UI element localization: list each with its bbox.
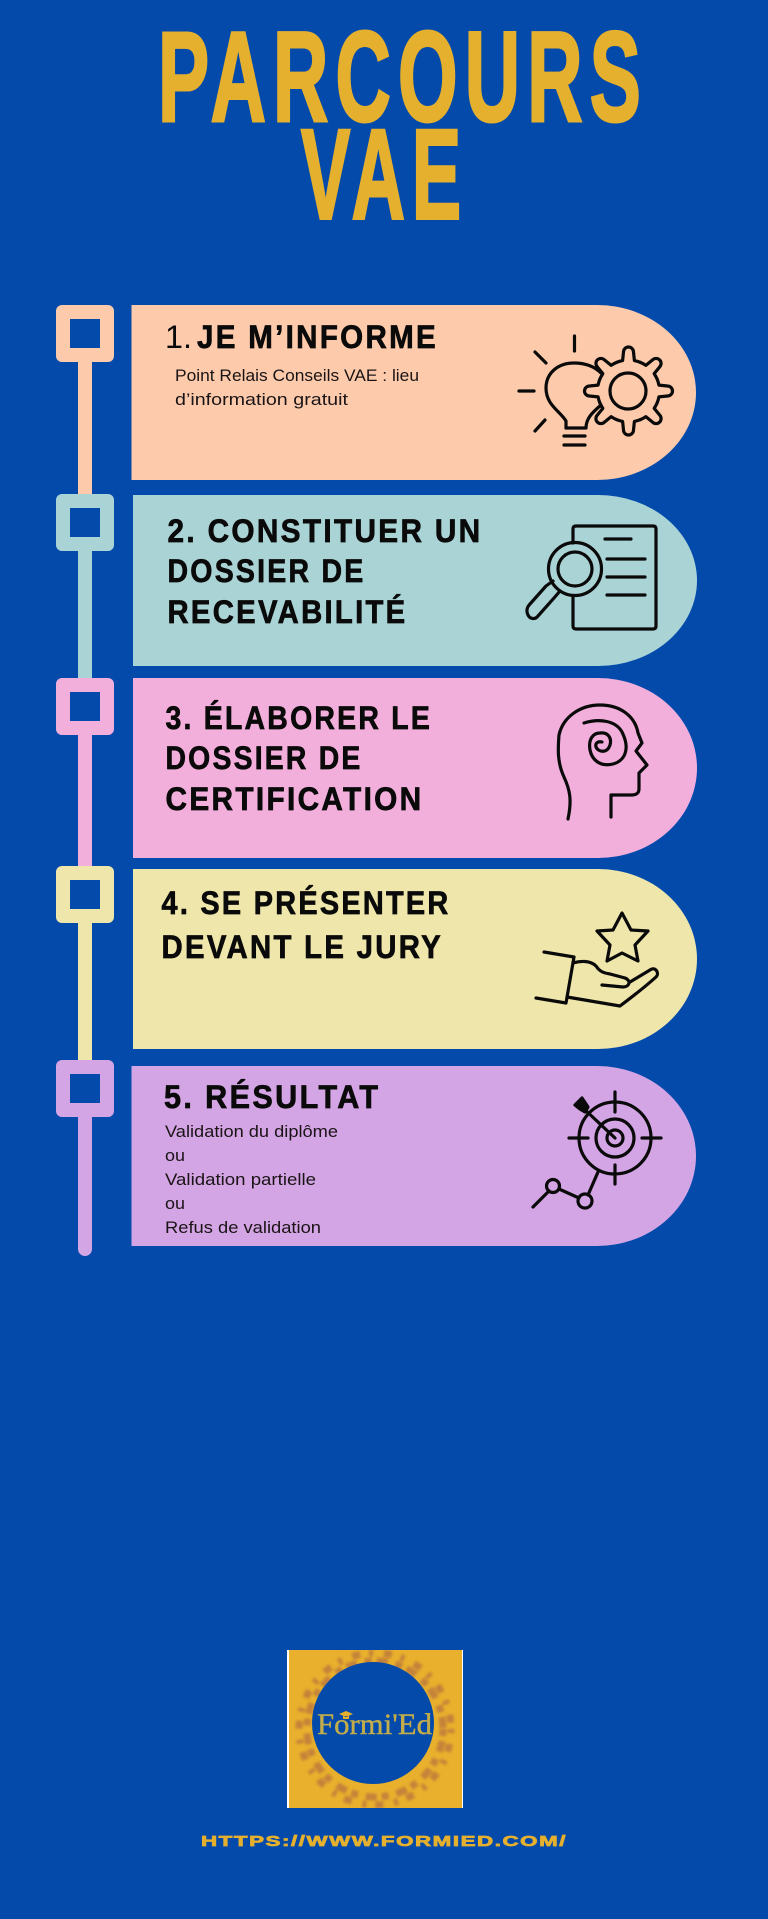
panel: step 5: Validation du diplôme [165, 1123, 338, 1141]
icon: hand holding star [536, 913, 657, 1006]
website url: HTTPS://WWW.FORMIED.COM/ [201, 1834, 567, 1850]
icon: document and magnifier [527, 526, 656, 629]
panel: step 4: DEVANT LE JURY [162, 929, 443, 965]
panel: step 5: Refus de validation [165, 1219, 321, 1237]
panel: step 5 [132, 1066, 696, 1246]
title: VAE [301, 104, 468, 246]
panel: step 2 [133, 495, 697, 666]
panel: step 5: ou [165, 1195, 185, 1213]
panel: step 5: ou [165, 1147, 185, 1165]
panel: step 2: 2. CONSTITUER UN [168, 513, 482, 549]
panel: step 3: CERTIFICATION [166, 781, 424, 817]
panel: step 1 [132, 305, 696, 480]
panel: step 5: Validation partielle [165, 1171, 316, 1189]
icon: light bulb and gear [519, 336, 672, 445]
panel: step 4: 4. SE PRÉSENTER [162, 885, 450, 921]
icon: head with spiral [558, 705, 647, 819]
logo mortarboard [339, 1711, 353, 1719]
panel: step 5: 5. RÉSULTAT [164, 1079, 380, 1115]
title [158, 6, 648, 246]
panel: step 4 [133, 869, 697, 1049]
panel: step 3: 3. ÉLABORER LE [166, 700, 432, 736]
panel: step 1: d’information gratuit [175, 391, 348, 409]
panel: step 3: DOSSIER DE [166, 740, 362, 776]
panel: step 2: RECEVABILITÉ [168, 594, 408, 630]
timeline [56, 305, 114, 1256]
icon: target with arrow and chart line [533, 1092, 661, 1208]
panel: step 2: DOSSIER DE [168, 553, 366, 589]
logo [287, 1650, 463, 1808]
panel: step 3 [133, 678, 697, 858]
panel: step 1: Point Relais Conseils VAE : lieu [175, 367, 419, 385]
panel: step 1: JE M’INFORME [197, 319, 438, 355]
panel: step 1: 1. [165, 319, 192, 355]
logo wordmark: Formi'Ed [317, 1708, 432, 1741]
logo ring of figures [299, 1653, 451, 1805]
